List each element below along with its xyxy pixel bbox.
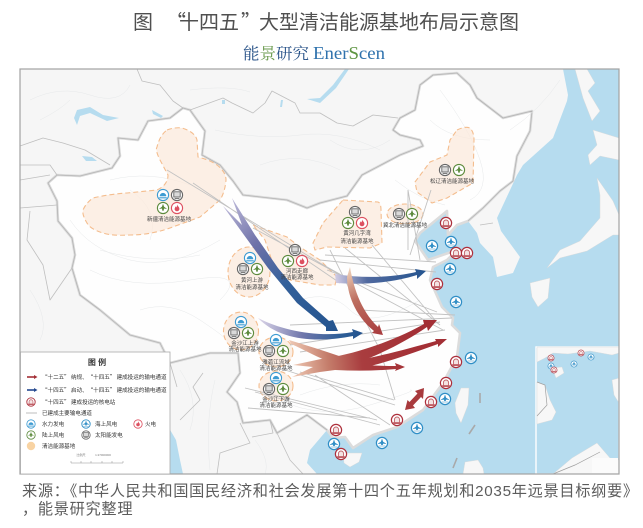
arrow: blue channel northwest to central China (223, 198, 338, 331)
Xinjiang base icons and label (147, 189, 191, 223)
source text: ，能景研究整理 (22, 501, 133, 518)
lower Jinsha icons and label: 金沙江下游 (262, 395, 290, 403)
logo: EnerScen: EnerScen (313, 43, 385, 63)
title: 图 (133, 6, 153, 35)
arrows: red channel bundle to east China (289, 320, 447, 377)
source text: 来源：《中华人民共和国国民经济和社会发展第十四个五年规划和2035年远景目标纲要》 (22, 482, 639, 500)
logo: EnerScen: 能景研究 (243, 41, 309, 64)
legend: thermal (134, 420, 157, 428)
existing transmission lines (167, 170, 455, 425)
base: upper Jinsha (224, 312, 258, 350)
Hexi Corridor icons and label: 河西走廊 (286, 267, 308, 275)
base: Xinjiang (83, 128, 226, 235)
Jibei icons and label: 冀北清洁能源基地 (383, 221, 427, 229)
upper Jinsha icons and label: 清洁能源基地 (228, 345, 262, 353)
title: ” (241, 6, 261, 35)
source text (22, 482, 639, 518)
title: 十四五 (179, 6, 239, 35)
legend: solar (82, 431, 123, 439)
base: Yalong (259, 337, 293, 367)
Hexi Corridor icons and label: 清洁能源基地 (280, 273, 314, 281)
neighbouring borders (20, 69, 493, 474)
arrow: blue channel Jinsha to central China (258, 318, 363, 340)
arrow: blue channel Hexi to east coast (335, 269, 426, 284)
inset scale box (592, 458, 618, 473)
legend: solar: 太阳能发电 (95, 431, 123, 439)
base: upper Yellow River (228, 247, 270, 297)
legend: nuclear: “十四五” 建成投运的核电站 (42, 398, 116, 406)
legend title: 图 例 (88, 357, 106, 367)
sea (307, 69, 619, 474)
arrow: red double arrow Guangdong-Fujian (405, 388, 424, 410)
upper Jinsha icons and label (228, 316, 262, 353)
Xinjiang base icons and label: 新疆清洁能源基地 (147, 215, 191, 223)
Yalong icons and label (259, 334, 293, 372)
legend: blue channel: “十四五” 启动、“十四五” 建成投运的输电通道 (42, 386, 167, 394)
islands of Japan and Sakhalin (530, 69, 619, 307)
legend: hydro: 水力发电 (42, 420, 65, 428)
clean energy base regions (83, 127, 474, 401)
Yalong icons and label: 清洁能源基地 (259, 364, 293, 372)
legend: existing lines: 已建成主要输电通道 (42, 409, 92, 417)
legend: onshore wind: 陆上风电 (42, 431, 65, 439)
legend: offshore wind: 海上风电 (95, 420, 118, 428)
Yalong icons and label: 雅砻江流域 (262, 358, 290, 366)
upper Yellow River icons and label (235, 252, 269, 291)
legend: offshore wind (82, 420, 118, 428)
legend: clean base: 清洁能源基地 (42, 442, 76, 450)
Hexi Corridor icons and label (280, 244, 314, 281)
legend: scale bar (71, 452, 123, 463)
upper Jinsha icons and label: 金沙江上游 (231, 339, 259, 347)
logo: EnerScen (243, 41, 385, 64)
legend: scale bar: 比例尺 (76, 452, 86, 457)
legend: hydro (27, 420, 65, 428)
faint rivers (30, 80, 560, 474)
upper Yellow River icons and label: 清洁能源基地 (235, 283, 269, 291)
title: “ (166, 6, 186, 35)
map frame (20, 69, 619, 474)
lakes (74, 69, 349, 161)
sea: Bay of Bengal (169, 428, 183, 474)
island of Taiwan and Hainan (343, 388, 469, 467)
base: Songliao (415, 127, 474, 203)
base: Jibei (387, 204, 423, 224)
title: 大型清洁能源基地布局示意图 (259, 6, 519, 35)
base: Ji-Hu (313, 200, 382, 250)
Ji-Hu icons and label: 清洁能源基地 (340, 237, 374, 245)
inset map: South China Sea (536, 347, 619, 474)
Songliao icons and label: 松辽清洁能源基地 (430, 177, 474, 185)
Jibei icons and label (383, 208, 427, 229)
Ji-Hu icons and label: 黄河几字湾 (343, 229, 371, 237)
China land (48, 73, 532, 448)
legend panel (20, 352, 170, 474)
Songliao icons and label (430, 164, 474, 185)
arrow: red channel to Hubei (347, 267, 383, 335)
lower Jinsha icons and label: 清洁能源基地 (259, 401, 293, 409)
upper Yellow River icons and label: 黄河上游 (241, 276, 263, 284)
legend: onshore wind (27, 431, 65, 439)
legend: red channel: “十二五” 纳规、“十四五” 建成投运的输电通道 (42, 373, 167, 381)
legend: clean base (27, 442, 76, 450)
Ji-Hu icons and label (340, 206, 374, 245)
base: lower Jinsha (259, 371, 293, 401)
legend: thermal: 火电 (145, 420, 157, 428)
neighbouring land (20, 69, 619, 474)
base: Hexi Corridor (253, 225, 337, 285)
legend: scale bar: 1:27000000 (95, 453, 111, 457)
coastal nuclear and offshore wind icons (328, 217, 477, 460)
lower Jinsha icons and label (259, 372, 293, 409)
nine-dash line (453, 393, 480, 468)
Philippines (463, 460, 484, 474)
